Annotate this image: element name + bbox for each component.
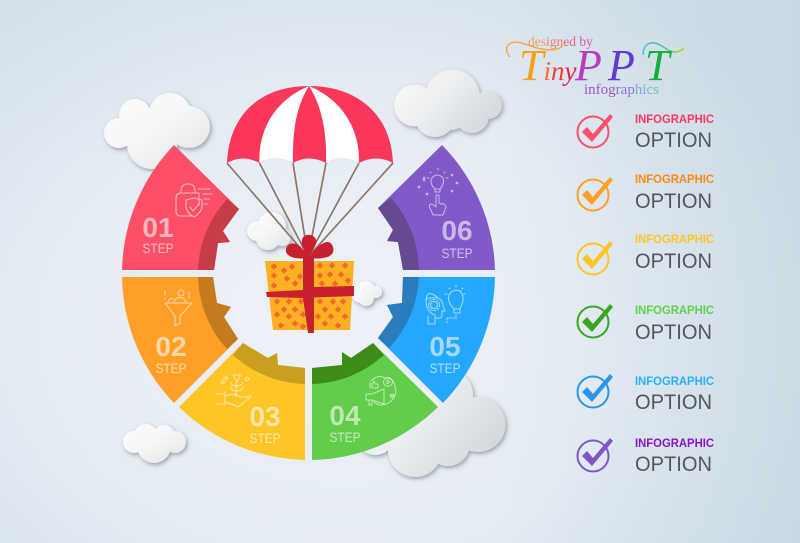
number 02: 02: [155, 331, 187, 362]
Tiny: Tiny: [519, 41, 576, 90]
label step: STEP: [330, 430, 360, 445]
canopy: [227, 86, 393, 163]
label: INFOGRAPHIC: [635, 114, 714, 126]
label: INFOGRAPHIC: [635, 234, 714, 246]
icon: head with gear and bulb: [426, 285, 465, 324]
number 05: 05: [429, 331, 461, 362]
PPT: P: [607, 41, 635, 90]
option 1: [578, 114, 714, 152]
option text: OPTION: [635, 453, 712, 476]
label step: STEP: [156, 361, 186, 376]
option text: OPTION: [635, 250, 712, 273]
number 06: 06: [441, 215, 473, 246]
number 04: 04: [329, 400, 361, 431]
icon: megaphone with likes: [366, 377, 396, 405]
option text: OPTION: [635, 321, 712, 344]
panel: step 03: [179, 343, 305, 460]
gift box: [265, 235, 354, 333]
option 5: [578, 374, 714, 414]
number 01: 01: [142, 212, 174, 243]
label step: STEP: [430, 361, 460, 376]
icon: padlock and shield: [176, 184, 212, 217]
cloud: top right: [390, 66, 505, 141]
ribbon: [266, 258, 354, 333]
option 2: [578, 174, 714, 213]
label: INFOGRAPHIC: [635, 174, 714, 186]
option 6: [578, 438, 714, 476]
cloud: bottom left: [120, 420, 190, 466]
logo: designed by Tiny PPT infographics: [507, 34, 684, 98]
infographics: infographics: [584, 82, 659, 98]
logo swash left: [507, 42, 563, 57]
panel: step 01: [122, 145, 239, 270]
icon: hand with plant: [216, 375, 251, 407]
icon: check: [578, 374, 613, 408]
number 03: 03: [249, 401, 281, 432]
PPT: T: [645, 41, 673, 90]
label: INFOGRAPHIC: [635, 305, 714, 317]
label step: STEP: [142, 241, 174, 256]
icon: check: [578, 241, 613, 274]
icon: funnel: [165, 290, 192, 326]
option 3: [578, 234, 714, 274]
icon: check: [578, 438, 613, 472]
logo swash right: [643, 43, 684, 55]
panel: step 06: [378, 145, 495, 270]
icon: finger with light bulb: [418, 168, 458, 215]
icon: check: [578, 304, 613, 338]
option 4: [578, 304, 714, 344]
icon: check: [578, 177, 613, 210]
suspension lines: [227, 163, 393, 257]
pattern of diamonds: [272, 263, 350, 329]
bow: [286, 235, 333, 259]
icon: check: [578, 114, 613, 148]
parachute: [227, 86, 393, 257]
cloud: top left: [100, 90, 215, 175]
label step: STEP: [250, 431, 280, 446]
cloud: bottom right: [360, 374, 510, 482]
PPT: P: [574, 41, 602, 90]
panel: step 05: [378, 277, 495, 403]
option text: OPTION: [635, 391, 712, 414]
label: INFOGRAPHIC: [635, 438, 714, 450]
option text: OPTION: [635, 129, 712, 152]
cloud: small beside gift: [350, 279, 384, 309]
label: INFOGRAPHIC: [635, 376, 714, 388]
designed by: designed by: [528, 34, 593, 49]
option text: OPTION: [635, 190, 712, 213]
cloud: small behind parachute lines: [244, 210, 294, 252]
panel: step 02: [122, 277, 238, 403]
panel: step 04: [312, 343, 438, 460]
label step: STEP: [442, 246, 472, 261]
